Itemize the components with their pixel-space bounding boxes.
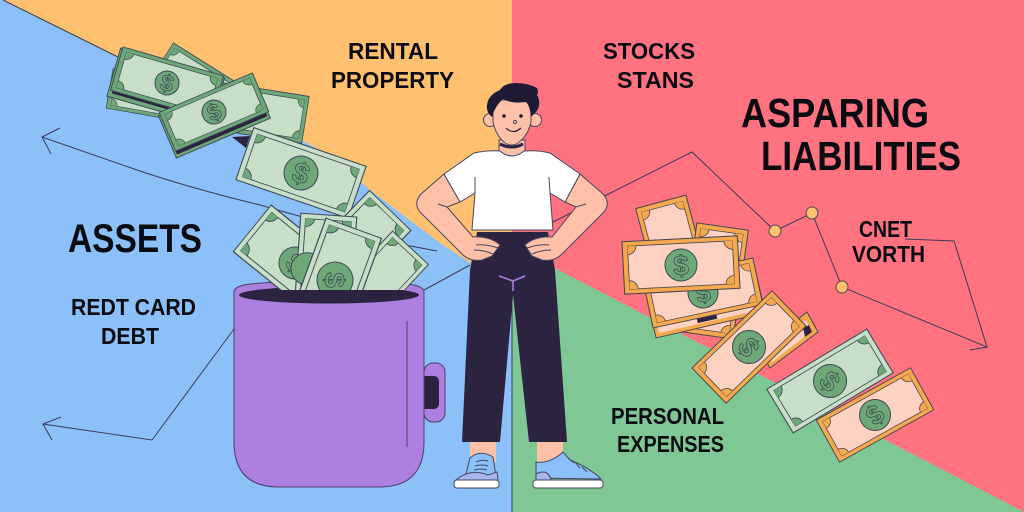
hand finger lines (438, 204, 586, 254)
label: credit card debt (71, 294, 196, 349)
label: stocks stans: STOCKS (603, 38, 695, 64)
trousers (462, 232, 567, 442)
neck (499, 140, 525, 156)
banknotes: orange tumbling pair: $ (731, 332, 766, 363)
label: rental property: RENTAL (348, 38, 438, 64)
label: net worth: VORTH (852, 241, 925, 267)
banknotes: orange stack: $ (693, 277, 714, 309)
heading: asparing liabilities (741, 90, 961, 179)
label: rental property: PROPERTY (331, 67, 454, 93)
divider line (3, 0, 512, 512)
banknotes: orange and green pair: $ (860, 399, 890, 431)
arrow: liabilities trend line (553, 152, 987, 350)
heading: asparing liabilities: LIABILITIES (761, 133, 961, 179)
label: stocks stans (603, 38, 695, 93)
banknotes: falling top stack: $ (203, 97, 225, 126)
panel: rental property background (3, 0, 512, 290)
panel: liabilities background (512, 0, 1024, 512)
heading: assets: ASSETS (68, 217, 202, 261)
label: stocks stans: STANS (617, 67, 694, 93)
banknote: large tumbling note (232, 123, 370, 223)
arrow: upper assets trend line (42, 128, 437, 251)
left arm (417, 174, 500, 260)
label: personal expenses (611, 403, 724, 457)
right arm (525, 174, 607, 260)
banknotes: orange and green pair: $ (813, 365, 846, 398)
banknotes: in the mug: $ (319, 272, 350, 288)
banknotes: falling top stack: $ (157, 69, 177, 97)
banknotes: orange stack (619, 191, 766, 343)
person (417, 83, 607, 488)
label: credit card debt: DEBT (101, 323, 159, 349)
heading: asparing liabilities: ASPARING (741, 90, 929, 136)
label: personal expenses: EXPENSES (617, 431, 724, 457)
arrow: lower assets trend line (43, 265, 470, 440)
note with shadow: lower (158, 76, 270, 158)
right shoe (533, 452, 603, 488)
head (484, 83, 542, 147)
banknotes: in the mug (232, 190, 429, 290)
banknotes: falling top stack (103, 39, 312, 158)
banknotes: orange stack: $ (672, 250, 690, 281)
panel: personal expenses background (512, 246, 1024, 512)
label: net worth (852, 216, 925, 267)
sleeve folds (475, 177, 550, 193)
note with shadow: upper (107, 48, 225, 126)
trouser seam (499, 276, 525, 291)
label: rental property (331, 38, 454, 93)
banknotes: in the mug: $ (280, 247, 310, 280)
mug: body (234, 280, 445, 487)
t-shirt (444, 151, 580, 230)
chart nodes (769, 207, 848, 293)
banknotes: orange tumbling pair (687, 286, 818, 408)
label: credit card debt: REDT CARD (71, 294, 196, 320)
banknote: large tumbling note: $ (288, 156, 314, 192)
left shoe (454, 453, 499, 488)
label: personal expenses: PERSONAL (611, 403, 724, 429)
label: net worth: CNET (859, 216, 912, 242)
banknotes: orange and green pair (762, 324, 938, 466)
ankles (470, 440, 563, 462)
